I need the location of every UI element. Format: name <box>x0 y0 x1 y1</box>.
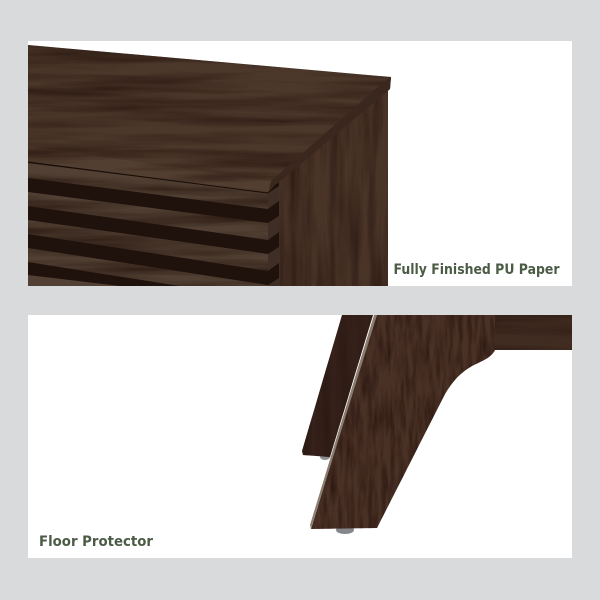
front foot pad <box>336 528 354 534</box>
slat 2 <box>28 192 279 240</box>
rear foot pad <box>320 456 330 460</box>
slat 5 <box>28 275 120 286</box>
leg edge highlight <box>310 315 377 529</box>
front leg <box>311 315 495 529</box>
panel: fully finished PU paper <box>28 41 572 300</box>
slat 4 <box>28 248 279 286</box>
slat 3 <box>28 220 279 271</box>
label: Floor Protector: Floor Protector <box>39 534 153 550</box>
tabletop front edge <box>28 146 271 193</box>
photo: furniture leg <box>302 315 572 534</box>
tabletop surface <box>28 45 391 193</box>
panel: floor protector <box>28 315 572 558</box>
shadow line under tabletop <box>28 162 277 193</box>
slat gaps <box>28 155 279 286</box>
cabinet side panel <box>279 84 388 286</box>
tabletop right edge <box>269 77 391 190</box>
label: Fully Finished PU Paper: Fully Finished PU Paper <box>394 262 560 278</box>
side rail <box>495 315 572 350</box>
rear leg <box>302 315 373 457</box>
photo: cabinet top corner <box>28 45 391 300</box>
slat 1 <box>28 163 279 209</box>
